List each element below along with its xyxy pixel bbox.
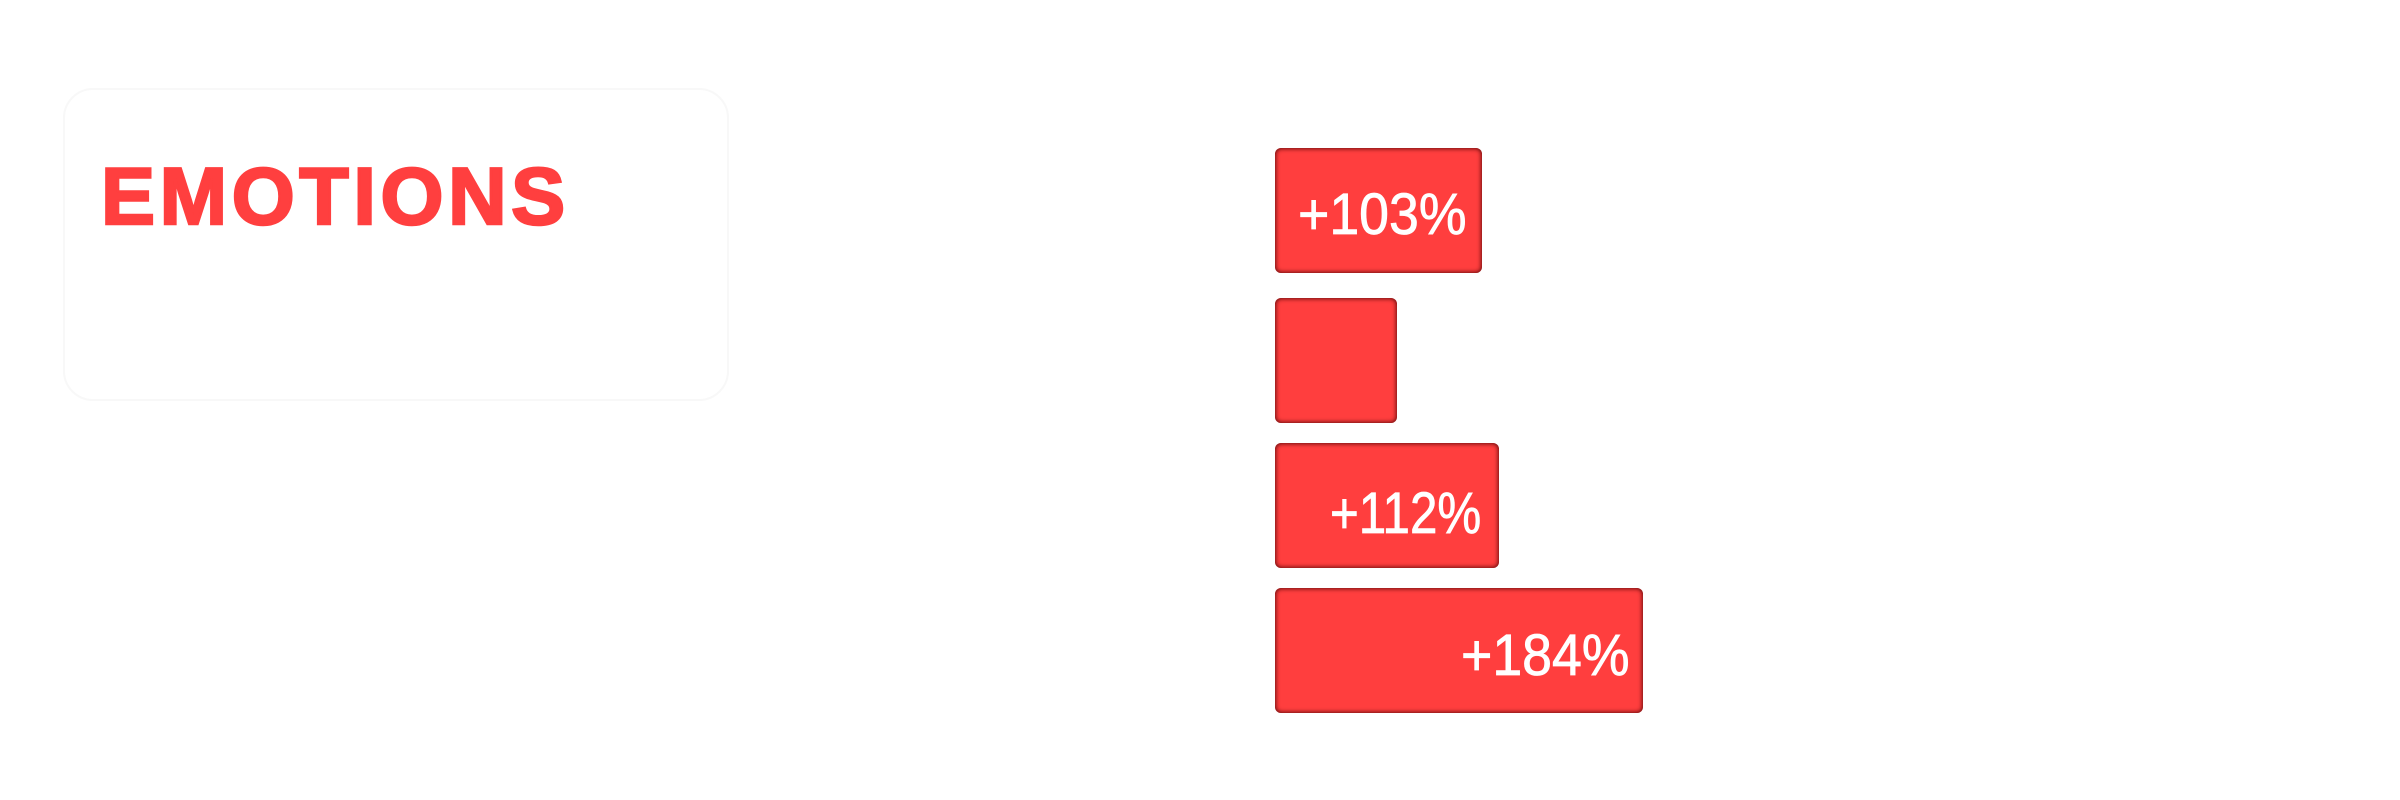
heading: EMOTIONS: EMOTIONS (101, 152, 570, 242)
bar: +103% (1275, 148, 1482, 273)
bar: +112% (1275, 443, 1499, 568)
value label: +103%: +103% (1298, 182, 1467, 247)
panel: emotions card (63, 88, 729, 401)
bar: unlabelled (1275, 298, 1397, 423)
bar: +184% (1275, 588, 1643, 713)
value label: +184%: +184% (1460, 623, 1629, 688)
value label: +112%: +112% (1330, 481, 1481, 546)
